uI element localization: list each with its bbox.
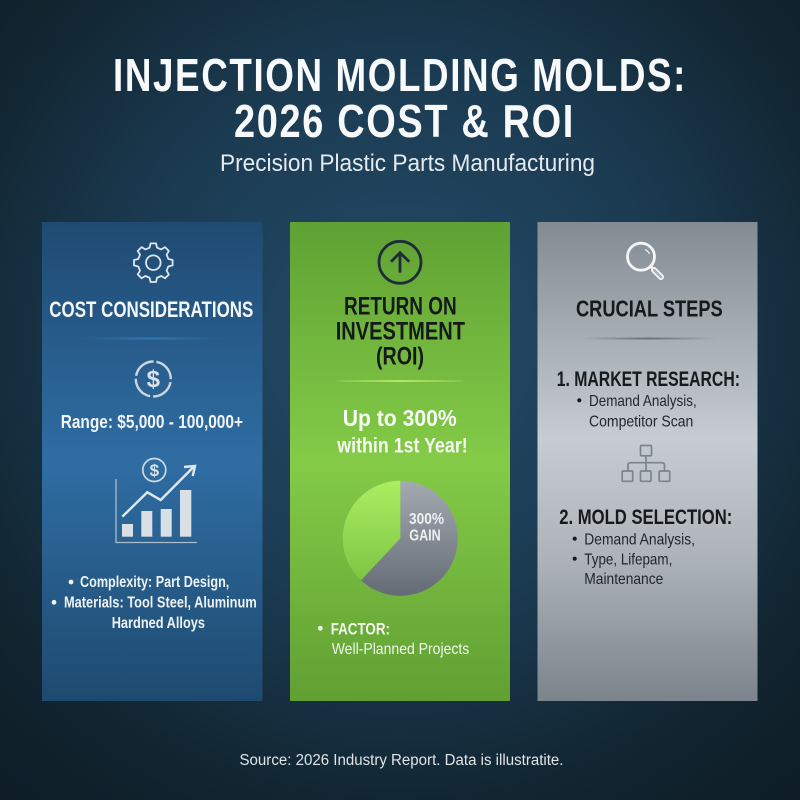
cost bullet list: Complexity: Part Design,	[80, 574, 229, 591]
icon: growth chart	[116, 458, 197, 542]
roi factor note: Well-Planned Projects	[332, 641, 469, 658]
step 2 mold selection: 2. MOLD SELECTION:	[559, 506, 732, 529]
step 2 mold selection: Demand Analysis,	[584, 531, 695, 548]
step 2 mold selection: Maintenance	[584, 571, 663, 588]
panel: return on investment	[290, 222, 510, 701]
range text: Range: $5,000 - 100,000+	[61, 411, 243, 432]
icon: up arrow circle	[379, 241, 421, 283]
pie chart: GAIN	[409, 527, 441, 544]
cost bullet list: Hardned Alloys	[112, 615, 205, 632]
heading: cost considerations: COST CONSIDERATIONS	[49, 297, 253, 322]
step 1 market research: Demand Analysis,	[589, 393, 697, 410]
icon: gear	[134, 243, 173, 282]
roi headline: Up to 300%	[343, 405, 457, 431]
roi factor note	[318, 619, 469, 658]
step 1 market research: 1. MARKET RESEARCH:	[557, 368, 740, 391]
heading: crucial steps: CRUCIAL STEPS	[576, 296, 723, 322]
roi factor note: FACTOR:	[331, 619, 390, 638]
panel: crucial steps	[538, 222, 758, 701]
step 1 market research: Competitor Scan	[589, 414, 693, 431]
heading: return on investment: INVESTMENT	[336, 317, 465, 345]
source footer: Source: 2026 Industry Report. Data is illustratite.	[240, 752, 564, 769]
pie chart: 300%	[409, 511, 444, 528]
title	[113, 49, 687, 147]
roi headline	[336, 405, 468, 458]
cost bullet list	[52, 574, 257, 632]
step 1 market research	[557, 368, 740, 431]
icon: growth chart: $	[150, 461, 160, 480]
heading: return on investment: (ROI)	[376, 342, 424, 370]
subtitle: Precision Plastic Parts Manufacturing	[220, 150, 595, 177]
icon: hierarchy	[622, 446, 670, 481]
icon: dollar circle	[133, 359, 174, 399]
cost bullet list: Materials: Tool Steel, Aluminum	[64, 595, 257, 612]
step 2 mold selection: Type, Lifepam,	[584, 552, 672, 569]
icon: dollar circle: $	[147, 366, 161, 393]
step 2 mold selection	[559, 506, 732, 588]
roi headline: within 1st Year!	[336, 435, 468, 458]
heading: return on investment: RETURN ON	[344, 292, 457, 320]
heading: return on investment	[336, 292, 465, 370]
pie chart	[343, 481, 458, 596]
title: 2026 COST & ROI	[234, 95, 575, 147]
icon: magnifier	[628, 243, 661, 277]
panel: cost considerations	[42, 222, 262, 701]
